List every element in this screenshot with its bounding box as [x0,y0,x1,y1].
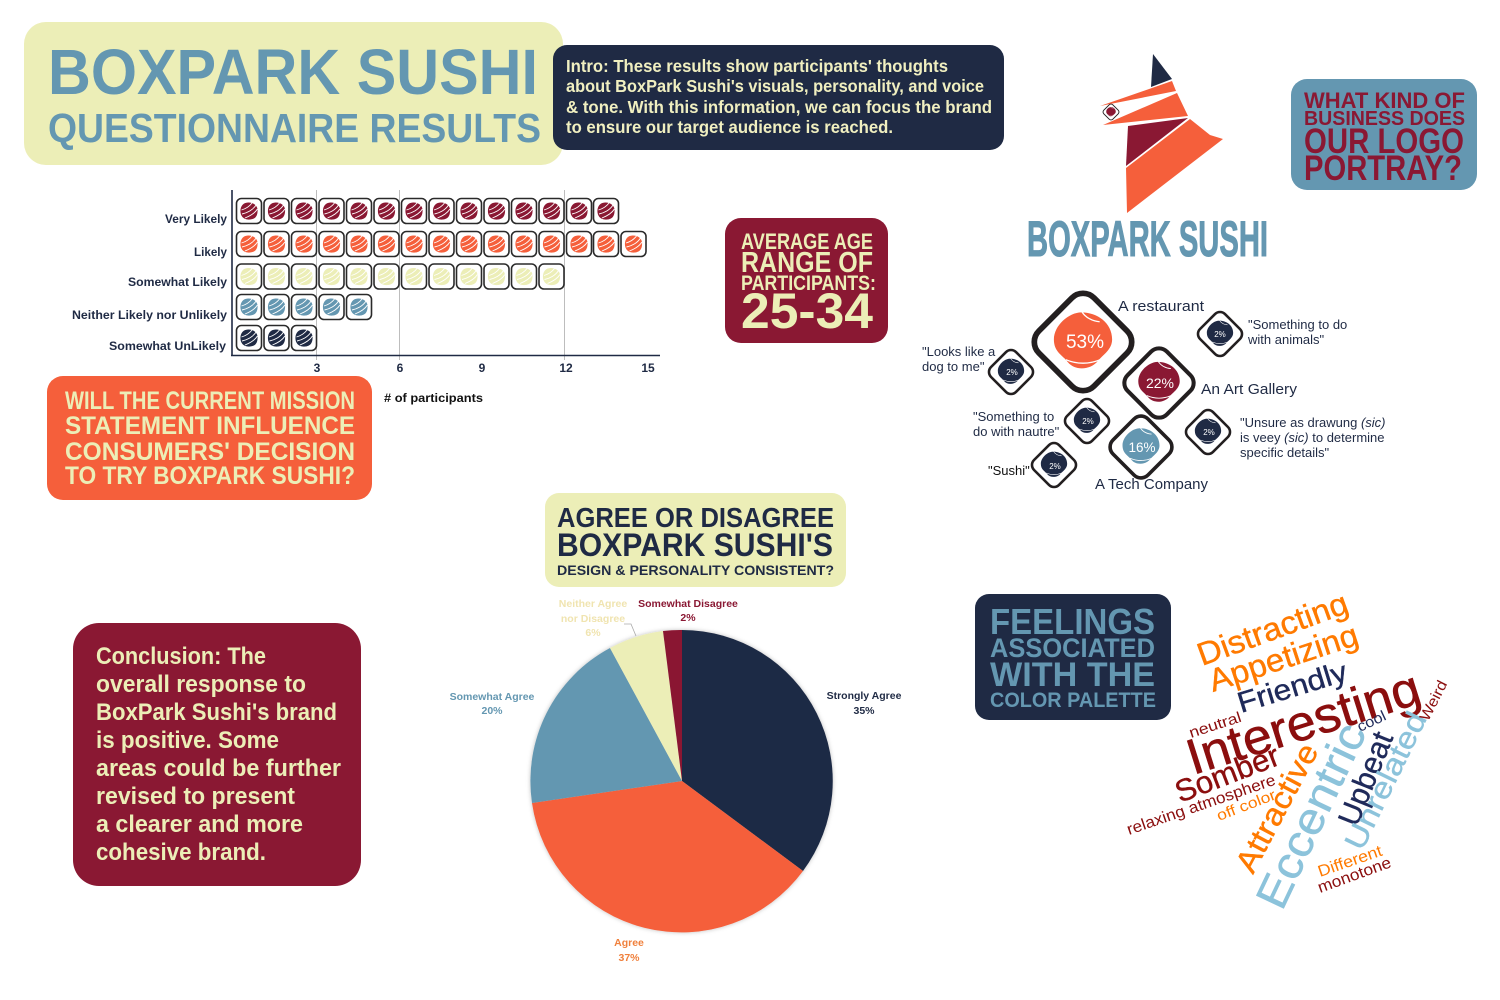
unsure 2%: "Unsure as drawung [1240,415,1361,430]
axis numbers: 15 [641,361,655,375]
axis numbers: 9 [479,361,486,375]
panel: conclusion [73,623,361,886]
panel: feelings heading: ASSOCIATED [990,633,1155,663]
pie labels: Strongly Agree [827,690,902,702]
axis title: # of participants [384,391,483,405]
category labels: Very Likely [165,214,228,226]
restaurant 53%: 53% [1066,332,1104,353]
unsure 2%: specific details" [1240,445,1330,460]
something to do with animals 2%: "Something to do [1248,317,1347,332]
sushi 2%: "Sushi" [988,463,1030,478]
panel: feelings heading: COLOR PALETTE [990,689,1156,712]
intro text: about BoxPark Sushi's visuals, personality, and voice [566,76,984,96]
something to do with nature 2%: "Something to [973,409,1054,424]
art gallery 22%: 22% [1146,375,1174,391]
panel: conclusion: areas could be further [96,755,341,782]
row: somewhat unlikely, 3 [236,326,316,350]
word cloud: Weird [1416,678,1451,724]
something to do with nature 2% [973,396,1112,446]
pie labels: nor Disagree [561,613,625,625]
panel: feelings heading: FEELINGS [990,601,1155,642]
panel: logo question [1291,79,1477,190]
looks like a dog 2%: 2% [1006,368,1018,377]
panel: logo question: OUR LOGO [1304,122,1464,161]
intro text: Intro: These results show participants' thoughts [566,56,948,76]
intro text: & tone. With this information, we can focus the brand [566,97,992,117]
pie labels [450,598,902,964]
pie labels: 20% [481,705,503,717]
panel: mission statement question [47,376,372,500]
category labels: Likely [194,247,228,259]
panel: average age: RANGE OF [741,247,873,279]
panel: logo question: PORTRAY? [1304,149,1462,188]
sushi 2%: 2% [1049,462,1061,471]
panel: logo question: BUSINESS DOES [1304,108,1465,130]
word cloud: Upbeat [1331,726,1400,831]
panel: average age: AVERAGE AGE [741,229,873,254]
title: Boxpark Sushi: BOXPARK SUSHI [48,36,538,108]
word cloud: Eccentric [1247,715,1376,916]
panel: logo question: WHAT KIND OF [1304,88,1465,113]
axis numbers [314,361,655,375]
panel: mission statement question: STATEMENT INFLUENCE [65,412,355,440]
unsure 2%: (sic) to determine [1284,430,1384,445]
pie labels: Agree [614,937,644,949]
pictogram bar chart [72,190,660,405]
word cloud: Unrelated [1339,707,1434,855]
category labels: Somewhat UnLikely [109,341,227,353]
unsure 2% [1183,407,1386,460]
panel: agree or disagree heading: AGREE OR DISAGREE [557,502,834,533]
panel: mission statement question: CONSUMERS' DECISION [65,438,355,466]
pie labels: 37% [618,952,640,964]
category labels [72,214,228,353]
something to do with animals 2%: with animals" [1247,332,1325,347]
logo wordmark: BOXPARK SUSHI [1027,211,1268,267]
category labels: Neither Likely nor Unlikely [72,310,228,322]
word cloud: Distracting [1192,585,1353,673]
row: somewhat likely, 12 [236,264,564,289]
row: very likely, 14 [236,198,618,224]
word cloud: Somber [1170,738,1284,810]
something to do with animals 2%: 2% [1214,330,1226,339]
panel: intro [553,45,1004,150]
word cloud: cool [1355,708,1389,736]
axis numbers: 6 [397,361,404,375]
subtitle: questionnaire results: QUESTIONNAIRE RESULTS [48,105,541,151]
sushi 2% [988,440,1079,490]
pie labels: Neither Agree [559,598,627,610]
word cloud: neutral [1187,709,1244,742]
title panel [24,22,563,165]
pie labels: 6% [585,627,601,639]
restaurant 53% [1028,287,1204,397]
panel: average age: PARTICIPANTS: [741,272,876,295]
panel: agree or disagree heading: DESIGN & PERSONALITY CONSISTENT? [557,562,834,578]
axis numbers: 12 [559,361,573,375]
panel: feelings heading [975,594,1171,720]
panel: mission statement question: TO TRY BOXPARK SUSHI? [65,462,355,490]
logo [1027,54,1268,267]
panel: agree or disagree heading: BOXPARK SUSHI'S [557,527,833,563]
panel: conclusion: cohesive brand. [96,839,266,866]
word cloud: Friendly [1234,656,1352,720]
looks like a dog 2% [922,344,1036,397]
panel: conclusion: BoxPark Sushi's brand [96,699,337,726]
word cloud: Different [1316,843,1385,881]
looks like a dog 2%: dog to me" [922,359,985,374]
something to do with animals 2% [1195,309,1347,359]
intro text [566,56,992,137]
art gallery 22% [1120,344,1298,422]
pie labels: Somewhat Agree [450,691,535,703]
axis numbers: 3 [314,361,321,375]
pie chart [450,598,902,964]
panel: agree or disagree heading [545,493,846,587]
word cloud: off color [1214,787,1278,825]
panel: conclusion: revised to present [96,783,295,810]
word cloud: monotone [1316,854,1394,897]
looks like a dog 2%: "Looks like a [922,344,996,359]
tech company 16% [1095,412,1209,493]
art gallery 22%: An Art Gallery [1201,382,1298,398]
pie labels: 35% [853,705,875,717]
panel: conclusion: is positive. Some [96,727,279,754]
unsure 2%: 2% [1203,428,1215,437]
panel: conclusion: overall response to [96,671,306,698]
tech company 16%: 16% [1128,440,1156,455]
word cloud [1125,585,1451,916]
row: likely, 15 [236,232,646,256]
panel: average age: 25-34 [741,283,873,339]
panel: average age [725,218,888,343]
something to do with nature 2%: 2% [1082,417,1094,426]
unsure 2%: is veey [1240,430,1284,445]
word cloud: relaxing atmosphere [1125,772,1278,839]
tech company 16%: A Tech Company [1095,477,1209,493]
panel: mission statement question: WILL THE CURRENT MISSION [65,387,355,415]
word cloud: Attractive [1228,737,1325,878]
panel: conclusion: a clearer and more [96,811,303,838]
logo icon: sushi diamond [1102,103,1120,121]
diagram: logo associations [922,287,1386,493]
word cloud: Appetizing [1204,617,1363,699]
something to do with nature 2%: do with nautre" [973,424,1060,439]
word cloud: Interesting [1179,659,1427,785]
restaurant 53%: A restaurant [1118,299,1204,315]
category labels: Somewhat Likely [128,277,228,289]
pie labels: Somewhat Disagree [638,598,738,610]
intro text: to ensure our target audience is reached. [566,117,893,137]
panel: feelings heading: WITH THE [990,656,1155,694]
panel: conclusion: Conclusion: The [96,643,266,670]
pie labels: 2% [680,612,696,624]
row: neither, 5 [236,294,372,320]
unsure 2%: (sic) [1361,415,1386,430]
